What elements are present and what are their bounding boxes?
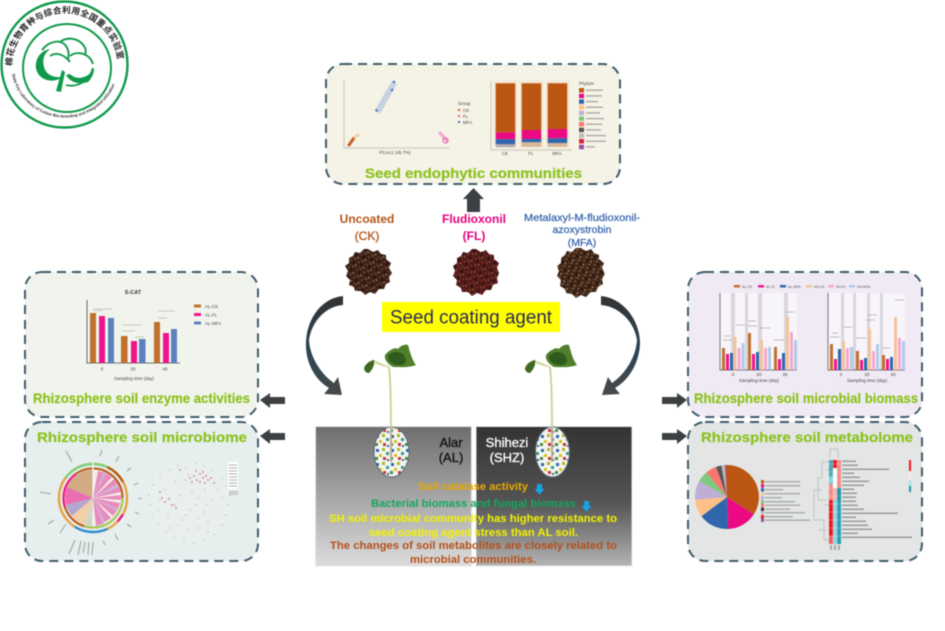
seed pile: uncoated (345, 249, 392, 295)
finding: SH resistance: SH soil microbial community has higher resistance to (329, 513, 617, 525)
heading: seed endophytic communities: Seed endophytic communities (365, 165, 582, 181)
label: fludioxonil (442, 212, 506, 243)
plant: Alar seedling (364, 345, 416, 462)
biomass legend: SH-FL (836, 285, 846, 289)
seed pile: fludioxonil (453, 249, 499, 296)
PCoA scatter plot: FL (463, 114, 469, 119)
panel: rhizosphere soil microbiome (25, 422, 258, 561)
arrow: up to seed endophytic communities (463, 188, 484, 212)
soil oval: Shihezi (536, 427, 570, 477)
finding: metabolites (330, 540, 617, 566)
heatmap with dendrogram (814, 449, 912, 550)
logo: cotton laboratory seal (0, 0, 130, 130)
bar chart: S-CAT: S-CAT (125, 290, 142, 296)
label: seed coating agent: Seed coating agent (390, 308, 553, 328)
panel: rhizosphere soil enzyme activities (25, 272, 258, 417)
logo: cotton laboratory seal: 棉花生物育种与综合利用全国重点实验室 (4, 5, 125, 66)
biomass legend: AL-MFA (788, 285, 801, 289)
bar chart legend: AL-FL (205, 312, 218, 318)
bar chart: fungal biomass: 40 (890, 372, 896, 377)
bar chart: fungal biomass: Sampling time (day) (847, 378, 888, 383)
biomass legend: AL-CK (742, 285, 753, 289)
panel: Shihezi soil background (476, 426, 632, 566)
logo: cotton laboratory seal: State Key Laboratory of Cotton Bio-breeding and Integrated Utilization (12, 73, 115, 118)
stacked bar chart: MFA (552, 151, 562, 156)
stacked bar chart: CK (502, 151, 508, 156)
soil oval: Alar (374, 427, 409, 477)
seed pile: metalaxyl mix (557, 248, 605, 298)
bar chart: bacterial biomass: 40 (782, 372, 788, 377)
arrow: to microbiome (260, 429, 285, 444)
arrow: to metabolome (662, 429, 687, 444)
heading: microbiome: Rhizosphere soil microbiome (37, 429, 247, 445)
bar chart: bacterial biomass: Sampling time (day) (739, 378, 780, 383)
label: metalaxyl-M-fludioxonil-azoxystrobin (524, 212, 641, 249)
label: Shihezi: Shihezi (486, 435, 528, 450)
PCoA scatter plot (344, 80, 472, 155)
bar chart legend: AL-CK (205, 304, 218, 309)
biomass legend: SH-MFA (857, 285, 871, 289)
bar chart: S-CAT: 20 (130, 366, 136, 372)
label: uncoated: Uncoated (340, 212, 394, 226)
label: Alar: Alar (439, 435, 463, 450)
arrow: to microbial biomass (662, 393, 687, 408)
label: Shihezi (486, 435, 528, 465)
bar chart: bacterial biomass (720, 293, 797, 383)
bar chart: S-CAT: Sampling time (day) (114, 376, 155, 381)
label: uncoated (340, 212, 394, 243)
stacked bar chart (491, 81, 572, 156)
icon: blue down arrow (534, 484, 544, 494)
icon: blue down arrow (582, 501, 592, 512)
stacked bar chart: FL (528, 151, 534, 156)
bar chart: fungal biomass: 20 (864, 372, 870, 377)
heading: microbial biomass: Rhizosphere soil microbial biomass (694, 390, 918, 406)
pie chart (695, 465, 759, 529)
finding: SH resistance (329, 513, 617, 539)
text block: findings (329, 481, 617, 566)
label: uncoated: (CK) (355, 229, 379, 243)
label: metalaxyl-M-fludioxonil-azoxystrobin: Metalaxyl-M-fludioxonil- (524, 212, 641, 224)
heatmap colour bar (909, 460, 911, 492)
label: Shihezi: (SHZ) (490, 450, 524, 465)
bar chart: bacterial biomass: 20 (756, 372, 762, 377)
label: Alar: (AL) (439, 450, 463, 465)
chord diagram (40, 450, 142, 555)
bar chart: S-CAT: 40 (162, 366, 168, 372)
finding: metabolites: microbial communities. (410, 554, 536, 566)
label: fludioxonil: Fludioxonil (442, 212, 506, 226)
label: seed coating agent (382, 302, 560, 332)
panel: rhizosphere soil microbial biomass (688, 272, 922, 417)
label: metalaxyl-M-fludioxonil-azoxystrobin: (MFA) (568, 237, 596, 249)
stacked bar legend (579, 81, 606, 149)
biomass legend: SH-CK (814, 285, 826, 289)
bar chart legend (194, 304, 221, 326)
finding: metabolites: The changes of soil metabolites are closely related to (330, 540, 617, 552)
bar chart: S-CAT: 0 (101, 366, 104, 372)
biomass legend (734, 285, 871, 289)
bar chart: bacterial biomass: 0 (732, 372, 735, 377)
heading: enzyme activities: Rhizosphere soil enzyme activities (33, 390, 250, 406)
panel: rhizosphere soil metabolome (688, 422, 922, 561)
biomass legend: AL-FL (766, 285, 776, 289)
pie legend (761, 480, 810, 522)
PCoA scatter plot: PCoA1 (45.7%) (379, 150, 411, 155)
arrow: curved left (306, 296, 343, 395)
network graph (147, 461, 238, 543)
heading: metabolome: Rhizosphere soil metabolome (701, 429, 913, 445)
label: metalaxyl-M-fludioxonil-azoxystrobin: azoxystrobin (553, 224, 612, 236)
arrow: curved right (601, 296, 640, 395)
panel: seed endophytic communities (326, 64, 620, 184)
finding: soil catalase: Soil catalase activity (418, 481, 529, 493)
bar chart: S-CAT (87, 290, 180, 381)
panel: Alar soil background (316, 426, 472, 566)
PCoA scatter plot: CK (463, 108, 469, 113)
plant: Shihezi seedling (525, 345, 577, 462)
arrow: to enzyme activities (260, 393, 285, 408)
stacked bar legend: Phylum (579, 81, 594, 86)
PCoA scatter plot: Group (458, 101, 471, 106)
finding: biomass: Bacterial biomass and fungal biomass (371, 498, 576, 510)
finding: SH resistance: seed coating agent stress than AL soil. (369, 527, 578, 539)
label: fludioxonil: (FL) (463, 229, 485, 243)
bar chart: fungal biomass: 0 (840, 372, 843, 377)
label: Alar (439, 435, 463, 465)
bar chart legend: AL-MFA (205, 321, 221, 326)
bar chart: fungal biomass (828, 293, 905, 383)
PCoA scatter plot: MFA (463, 120, 472, 125)
